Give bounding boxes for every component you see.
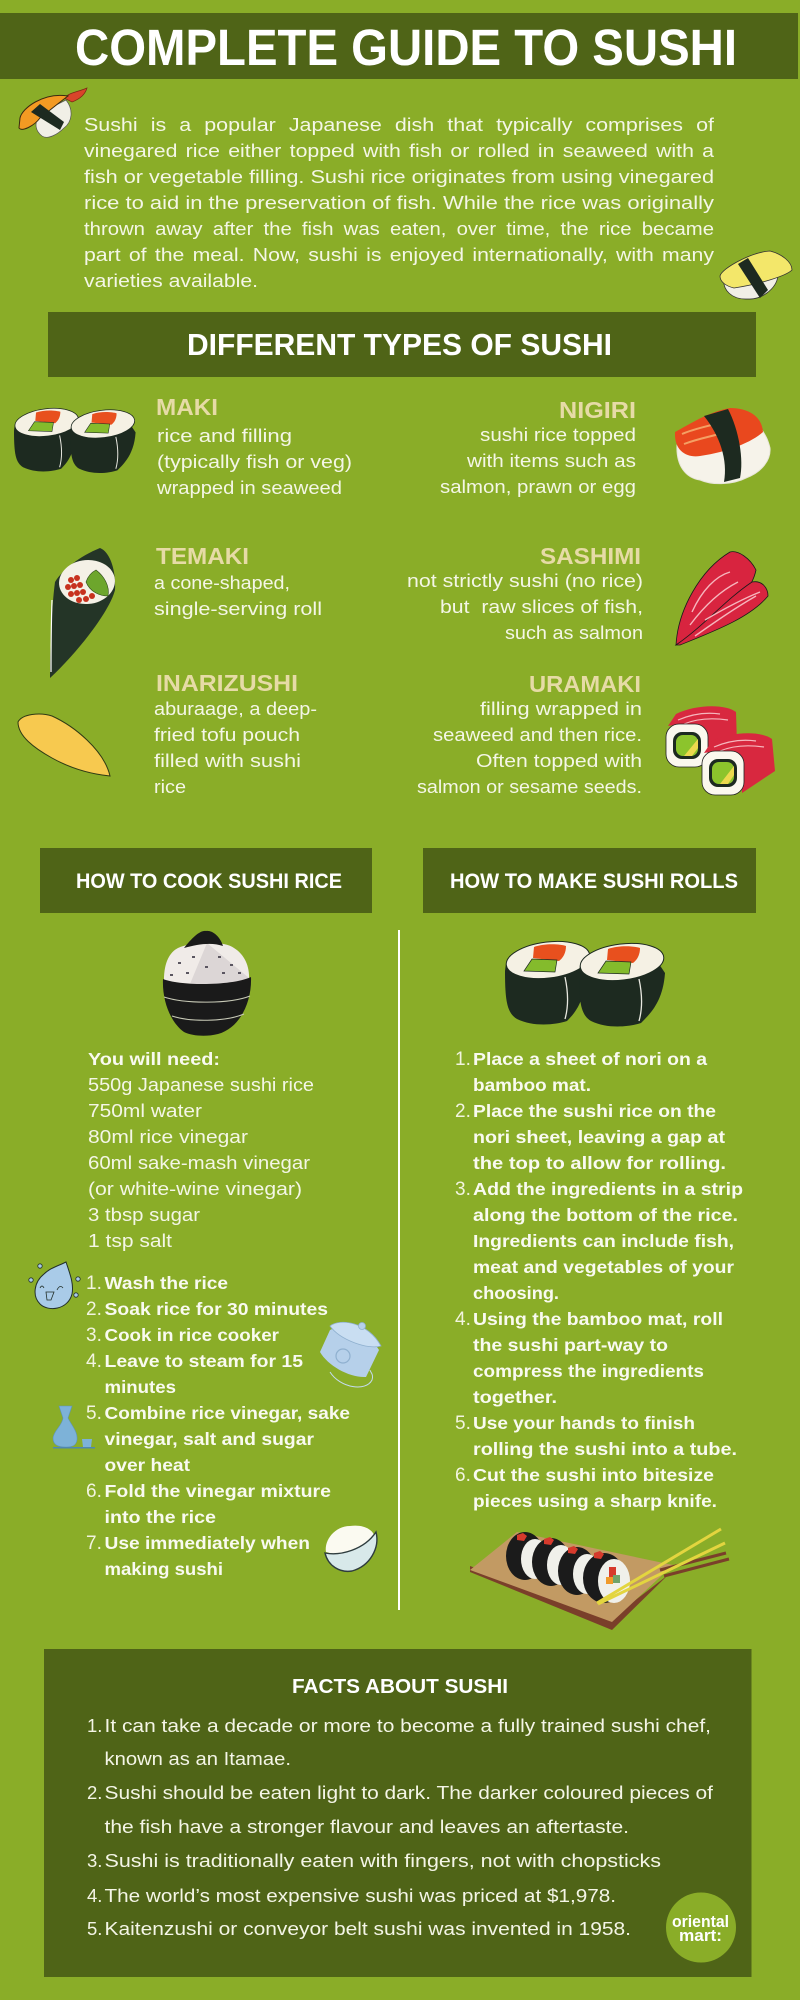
rolling steps: Using the bamboo mat, roll (473, 1309, 723, 1329)
icon: prawn nigiri (19, 88, 87, 137)
cooking steps (86, 1273, 350, 1579)
uramaki description: seaweed and then rice. (433, 725, 642, 745)
rolling steps: together. (473, 1387, 557, 1407)
rolling steps: meat and vegetables of your (473, 1257, 734, 1277)
cooking steps: into the rice (104, 1507, 216, 1527)
facts heading: FACTS ABOUT SUSHI (292, 1676, 508, 1698)
inarizushi description: fried tofu pouch (154, 725, 300, 745)
sashimi description (407, 571, 643, 643)
ingredients list: 3 tbsp sugar (88, 1205, 200, 1225)
heading: how to make sushi rolls: HOW TO MAKE SUSHI ROLLS (450, 870, 738, 893)
facts list: It can take a decade or more to become a fully trained sushi chef, (104, 1715, 711, 1736)
cooking steps: 1. (86, 1273, 102, 1294)
icon: temaki cone (50, 548, 117, 678)
sashimi heading: SASHIMI (540, 543, 641, 569)
cooking steps: Wash the rice (104, 1273, 228, 1293)
sashimi description: such as salmon (505, 623, 643, 643)
inarizushi heading: INARIZUSHI (156, 670, 298, 696)
ingredients list: 550g Japanese sushi rice (88, 1075, 314, 1095)
rolling steps: nori sheet, leaving a gap at (473, 1127, 725, 1147)
logo: oriental mart (666, 1892, 736, 1962)
ingredients list: You will need: (88, 1049, 220, 1069)
icon: maki rolls large (504, 937, 666, 1026)
icon: inarizushi pouch (18, 714, 110, 776)
facts list: 5. (87, 1918, 102, 1939)
icon: sushi on board with chopsticks (470, 1529, 729, 1630)
facts list: Kaitenzushi or conveyor belt sushi was invented in 1958. (104, 1918, 631, 1939)
divider (398, 930, 400, 1610)
inarizushi description: rice (154, 777, 186, 797)
inarizushi description: aburaage, a deep- (154, 699, 317, 719)
icon: bowl of rice (325, 1526, 377, 1571)
ingredients list (88, 1049, 314, 1251)
rolling steps: rolling the sushi into a tube. (473, 1439, 737, 1459)
heading text: DIFFERENT TYPES OF SUSHI (187, 327, 612, 362)
type: uramaki (417, 671, 775, 797)
icon: salmon nigiri (675, 408, 770, 484)
icon: rice cooker (320, 1322, 381, 1387)
intro text: thrown away after the fish was eaten, over time, the rice became (84, 219, 714, 239)
cooking steps: Fold the vinegar mixture (104, 1481, 331, 1501)
rolling steps: compress the ingredients (473, 1361, 704, 1381)
nigiri description: with items such as (466, 451, 636, 471)
maki heading: MAKI (156, 394, 218, 420)
uramaki description (417, 699, 642, 797)
ingredients list: (or white-wine vinegar) (88, 1179, 302, 1199)
nigiri heading: NIGIRI (559, 397, 636, 423)
type: nigiri (440, 397, 770, 497)
logo: oriental mart: oriental (672, 1912, 729, 1931)
cooking steps: minutes (104, 1377, 176, 1397)
nigiri description: sushi rice topped (480, 425, 636, 445)
intro text (84, 115, 715, 291)
rolling steps: 3. (455, 1179, 471, 1200)
cooking steps: 6. (86, 1481, 102, 1502)
rolling steps: the sushi part-way to (473, 1335, 668, 1355)
heading: how to cook sushi rice (40, 848, 372, 913)
facts list: Sushi should be eaten light to dark. The darker coloured pieces of (104, 1782, 714, 1803)
temaki heading: TEMAKI (156, 543, 249, 569)
nigiri description: salmon, prawn or egg (440, 477, 636, 497)
heading: how to cook sushi rice: HOW TO COOK SUSHI RICE (76, 870, 342, 893)
cooking steps: Cook in rice cooker (104, 1325, 279, 1345)
cooking steps: 4. (86, 1351, 102, 1372)
temaki description (154, 573, 322, 619)
section heading: different types of sushi (48, 312, 756, 377)
intro text: varieties available. (84, 271, 258, 291)
ingredients list: 80ml rice vinegar (88, 1127, 248, 1147)
cooking steps: over heat (104, 1455, 190, 1475)
facts list: 4. (87, 1885, 102, 1906)
icon: water drop (29, 1262, 80, 1309)
facts list: 1. (87, 1715, 102, 1736)
cooking steps: Use immediately when (104, 1533, 310, 1553)
title: COMPLETE GUIDE TO SUSHI (75, 19, 737, 76)
inarizushi description: filled with sushi (154, 751, 301, 771)
icon: egg nigiri (720, 251, 792, 299)
panel: facts about sushi (44, 1649, 752, 1977)
rolling steps: Ingredients can include fish, (473, 1231, 734, 1251)
type: temaki (50, 543, 322, 678)
rolling steps: bamboo mat. (473, 1075, 591, 1095)
cooking steps: 3. (86, 1325, 102, 1346)
rolling steps: Use your hands to finish (473, 1413, 695, 1433)
rolling steps: pieces using a sharp knife. (473, 1491, 717, 1511)
intro text: fish or vegetable filling. Sushi rice originates from using vinegared (84, 167, 714, 187)
rolling steps: 6. (455, 1465, 471, 1486)
facts list: the fish have a stronger flavour and leaves an aftertaste. (104, 1816, 629, 1837)
icon: sashimi slices (676, 552, 768, 645)
rolling steps: 4. (455, 1309, 471, 1330)
ingredients list: 1 tsp salt (88, 1231, 172, 1251)
panel: how to cook sushi rice (29, 848, 381, 1579)
intro text: Sushi is a popular Japanese dish that typically comprises of (84, 115, 715, 135)
rolling steps: Add the ingredients in a strip (473, 1179, 743, 1199)
inarizushi description (154, 699, 317, 797)
panel: how to make sushi rolls (423, 848, 756, 1630)
cooking steps: vinegar, salt and sugar (104, 1429, 314, 1449)
type: maki (13, 394, 352, 498)
cooking steps: Soak rice for 30 minutes (104, 1299, 328, 1319)
intro text: rice to aid in the preservation of fish. While the rice was originally (84, 193, 714, 213)
sashimi description: not strictly sushi (no rice) (407, 571, 643, 591)
rolling steps: choosing. (473, 1283, 559, 1303)
facts list: known as an Itamae. (104, 1748, 291, 1769)
rolling steps (455, 1049, 743, 1511)
rolling steps: 2. (455, 1101, 471, 1122)
type: inarizushi (18, 670, 317, 797)
title banner (0, 13, 798, 79)
maki description: wrapped in seaweed (156, 478, 342, 498)
cooking steps: 7. (86, 1533, 102, 1554)
icon: sake flask and cup (53, 1406, 95, 1448)
uramaki description: filling wrapped in (480, 699, 642, 719)
intro text: part of the meal. Now, sushi is enjoyed internationally, with many (84, 245, 714, 265)
logo: oriental mart: mart: (679, 1926, 722, 1945)
type: sashimi (407, 543, 768, 645)
sashimi description: but raw slices of fish, (440, 597, 643, 617)
cooking steps: 5. (86, 1403, 102, 1424)
rolling steps: Place a sheet of nori on a (473, 1049, 707, 1069)
icon: maki rolls (13, 405, 136, 473)
nigiri description (440, 425, 636, 497)
rolling steps: 1. (455, 1049, 471, 1070)
uramaki description: Often topped with (476, 751, 642, 771)
rolling steps: 5. (455, 1413, 471, 1434)
heading: how to make sushi rolls (423, 848, 756, 913)
facts list: 2. (87, 1782, 102, 1803)
facts list: 3. (87, 1850, 102, 1871)
rolling steps: the top to allow for rolling. (473, 1153, 726, 1173)
cooking steps: Leave to steam for 15 (104, 1351, 303, 1371)
cooking steps: Combine rice vinegar, sake (104, 1403, 350, 1423)
ingredients list: 60ml sake-mash vinegar (88, 1153, 310, 1173)
maki description: rice and filling (157, 426, 292, 446)
ingredients list: 750ml water (88, 1101, 202, 1121)
rolling steps: Place the sushi rice on the (473, 1101, 716, 1121)
icon: rice bowl (163, 931, 251, 1036)
temaki description: a cone-shaped, (154, 573, 290, 593)
facts list: Sushi is traditionally eaten with fingers, not with chopsticks (104, 1850, 661, 1871)
rolling steps: Cut the sushi into bitesize (473, 1465, 714, 1485)
intro text: vinegared rice either topped with fish or rolled in seaweed with a (84, 141, 715, 161)
icon: uramaki rolls (666, 706, 775, 795)
uramaki heading: URAMAKI (529, 671, 641, 697)
uramaki description: salmon or sesame seeds. (417, 777, 642, 797)
maki description: (typically fish or veg) (157, 452, 352, 472)
cooking steps: making sushi (104, 1559, 223, 1579)
facts list: The world’s most expensive sushi was priced at $1,978. (104, 1885, 616, 1906)
maki description (156, 426, 352, 498)
rolling steps: along the bottom of the rice. (473, 1205, 738, 1225)
facts list (87, 1715, 714, 1939)
cooking steps: 2. (86, 1299, 102, 1320)
temaki description: single-serving roll (154, 599, 322, 619)
